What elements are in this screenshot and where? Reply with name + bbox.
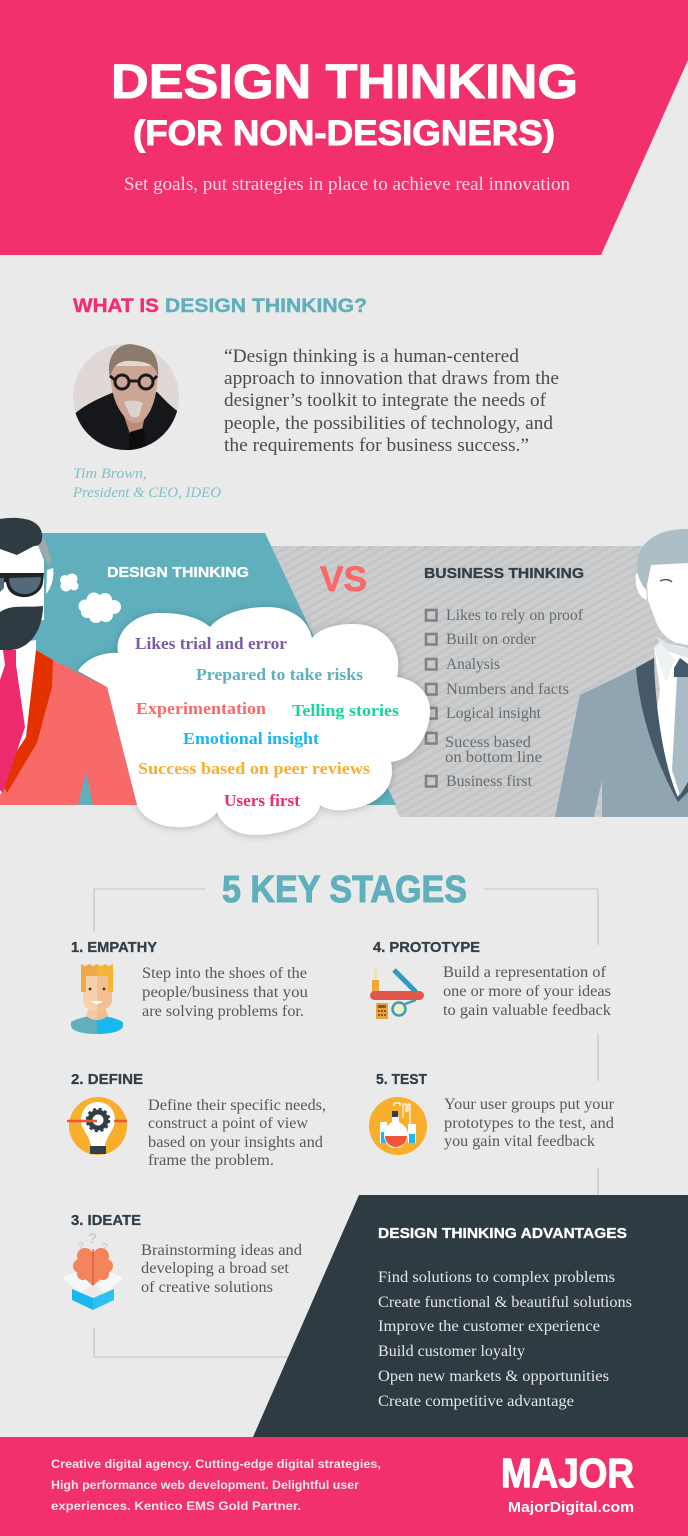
attribution: Tim Brown, xyxy=(73,466,147,482)
title: DESIGN THINKING xyxy=(111,56,578,109)
text xyxy=(148,1097,326,1169)
logo: MajorDigital.com xyxy=(508,1499,634,1516)
icon: light bulb xyxy=(67,1097,127,1155)
heading: 5 key stages: 5 KEY STAGES xyxy=(222,869,467,911)
advantages list: Improve the customer experience xyxy=(378,1318,600,1335)
heading: what is design thinking xyxy=(73,295,367,317)
icon: brain in box: ? xyxy=(88,1230,97,1247)
thought cloud xyxy=(78,607,430,835)
icon: brain in box xyxy=(62,1230,124,1310)
quote: approach to innovation that draws from the xyxy=(224,369,559,389)
footer xyxy=(0,1437,688,1536)
quote: “Design thinking is a human-centered xyxy=(224,347,520,367)
heading: what is design thinking: WHAT IS xyxy=(73,295,159,317)
attribution xyxy=(72,466,221,501)
panel: design thinking advantages xyxy=(253,1195,688,1437)
advantages list: Open new markets & opportunities xyxy=(378,1368,609,1385)
heading: 4. PROTOTYPE xyxy=(373,939,480,956)
heading: what is design thinking: DESIGN THINKING? xyxy=(165,295,367,317)
cloud texts: Emotional insight xyxy=(183,729,320,748)
attribution: President & CEO, IDEO xyxy=(72,485,221,501)
title xyxy=(111,56,578,153)
advantages list: Build customer loyalty xyxy=(378,1343,525,1360)
VS label: VS xyxy=(320,560,367,599)
checkbox list: Business first xyxy=(446,773,533,790)
header banner xyxy=(0,0,688,255)
stage 1: empathy xyxy=(71,939,308,1034)
quote: the requirements for business success.” xyxy=(224,436,529,456)
checkbox list: on bottom line xyxy=(445,749,542,766)
illustration: businessman xyxy=(555,529,688,817)
text: Build a representation of xyxy=(443,964,607,981)
icon: brain in box: ? xyxy=(78,1241,84,1252)
portrait: Tim Brown xyxy=(73,344,179,450)
footer text: experiences. Kentico EMS Gold Partner. xyxy=(51,1501,301,1513)
text: Define their specific needs, xyxy=(148,1097,326,1114)
panel: business thinking xyxy=(0,518,688,1536)
checkbox list: Likes to rely on proof xyxy=(446,607,584,624)
text: of creative solutions xyxy=(141,1279,273,1296)
advantages list: Create competitive advantage xyxy=(378,1393,574,1410)
heading: business thinking: BUSINESS THINKING xyxy=(424,565,584,582)
cloud texts: Likes trial and error xyxy=(135,634,287,653)
text: construct a point of view xyxy=(148,1115,309,1132)
title: (FOR NON-DESIGNERS) xyxy=(133,114,555,153)
quote: designer’s toolkit to integrate the needs of xyxy=(224,391,547,411)
icon: multi tool xyxy=(370,968,424,1019)
text xyxy=(142,965,308,1020)
cloud texts: Experimentation xyxy=(136,699,266,718)
advantages list: Find solutions to complex problems xyxy=(378,1269,615,1286)
text: prototypes to the test, and xyxy=(444,1115,614,1132)
advantages list: Create functional & beautiful solutions xyxy=(378,1294,632,1311)
text: Brainstorming ideas and xyxy=(141,1242,302,1259)
text: based on your insights and xyxy=(148,1134,323,1151)
text: are solving problems for. xyxy=(142,1003,304,1020)
logo xyxy=(501,1450,634,1516)
checkbox list: Logical insight xyxy=(446,705,542,722)
text: Step into the shoes of the xyxy=(142,965,307,982)
stage 2: define xyxy=(67,1071,326,1169)
text: people/business that you xyxy=(142,984,308,1001)
heading: design thinking: DESIGN THINKING xyxy=(107,564,249,581)
cloud texts: Prepared to take risks xyxy=(196,665,364,684)
heading: 3. IDEATE xyxy=(71,1212,141,1229)
quote: people, the possibilities of technology, and xyxy=(224,414,554,434)
footer text: Creative digital agency. Cutting-edge digital strategies, xyxy=(51,1459,381,1471)
text: one or more of your ideas xyxy=(443,983,611,1000)
checkbox list: Analysis xyxy=(446,656,500,673)
cloud texts: Telling stories xyxy=(292,701,400,720)
checkbox list: Sucess based xyxy=(445,734,531,751)
text xyxy=(141,1242,302,1296)
stage 5: test xyxy=(369,1071,615,1155)
stage 3: ideate xyxy=(62,1212,302,1310)
footer text: High performance web development. Delightful user xyxy=(51,1480,360,1492)
stage 4: prototype xyxy=(370,939,611,1019)
advantages list xyxy=(378,1269,632,1410)
icon: small thought clouds xyxy=(60,574,121,623)
cloud texts: Success based on peer reviews xyxy=(138,759,371,778)
text: Your user groups put your xyxy=(444,1096,615,1113)
icon: brain in box: ? xyxy=(102,1242,108,1253)
quote xyxy=(224,347,559,456)
heading: 2. DEFINE xyxy=(71,1071,143,1088)
checkbox list xyxy=(426,607,584,790)
checkbox list: Numbers and facts xyxy=(446,681,569,698)
footer text xyxy=(51,1459,381,1513)
heading: DESIGN THINKING ADVANTAGES xyxy=(378,1225,627,1242)
cloud texts: Users first xyxy=(224,791,301,810)
text: to gain valuable feedback xyxy=(443,1002,611,1019)
logo: MAJOR xyxy=(501,1450,634,1496)
heading: 5. TEST xyxy=(376,1071,427,1088)
icon: lab flask xyxy=(369,1097,427,1155)
subtitle: Set goals, put strategies in place to achieve real innovation xyxy=(124,175,570,195)
text: developing a broad set xyxy=(141,1260,290,1277)
icon: person xyxy=(71,964,123,1034)
panel: design thinking xyxy=(0,533,396,805)
cloud texts xyxy=(135,634,400,810)
text xyxy=(443,964,611,1019)
text: you gain vital feedback xyxy=(444,1133,595,1150)
text: frame the problem. xyxy=(148,1152,274,1169)
heading: 1. EMPATHY xyxy=(71,939,157,956)
illustration: bearded designer xyxy=(0,518,137,805)
text xyxy=(444,1096,615,1150)
checkbox list: Built on order xyxy=(446,631,537,648)
